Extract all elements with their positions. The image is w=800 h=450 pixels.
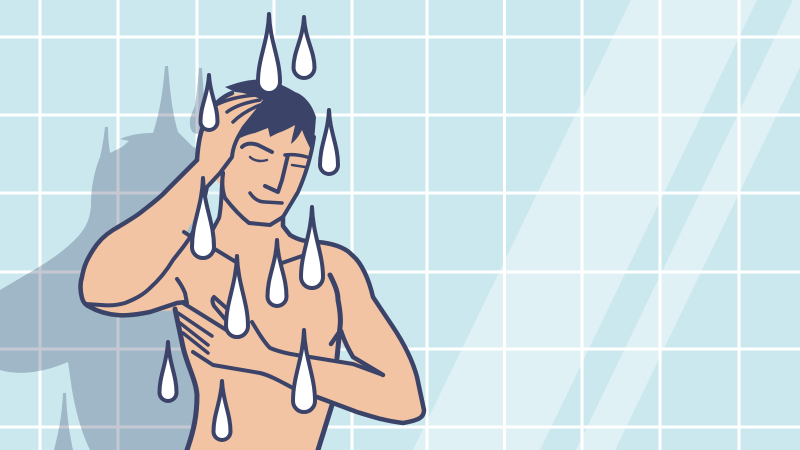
- drop 11: [214, 381, 230, 440]
- jaw and neck: [222, 137, 314, 225]
- hair: [225, 80, 316, 150]
- armpit and chest: [177, 279, 187, 303]
- collar lines: [184, 232, 193, 238]
- nose: [265, 155, 288, 192]
- water drops: [160, 14, 338, 440]
- wall visible between arm and neck: [202, 180, 222, 230]
- shadow of the man on the wall: [0, 66, 230, 450]
- drop 10: [160, 342, 176, 401]
- body outlines: [80, 93, 424, 450]
- left arm outline: [80, 160, 197, 315]
- drop 4: [200, 75, 218, 130]
- light reflection bands: [413, 0, 800, 450]
- eyebrows and closed eyes: [242, 144, 272, 152]
- torso sides: [175, 309, 197, 450]
- drop 5: [192, 178, 214, 258]
- hand on head: [197, 93, 232, 160]
- drop 9: [293, 330, 315, 412]
- hand and forearm on chest: [183, 303, 228, 331]
- drop 8: [226, 256, 248, 337]
- drop 7: [268, 240, 286, 306]
- drop 1: [258, 14, 280, 93]
- facial features: [242, 144, 307, 203]
- drop 3: [320, 110, 338, 174]
- man: [80, 80, 424, 450]
- skin silhouette: [80, 93, 424, 450]
- wall visible under the armpit: [338, 340, 354, 362]
- mouth: [250, 193, 282, 203]
- shadowed wall between arm and shoulder: [186, 212, 205, 236]
- drop 6: [301, 207, 323, 288]
- drop 2: [294, 17, 314, 78]
